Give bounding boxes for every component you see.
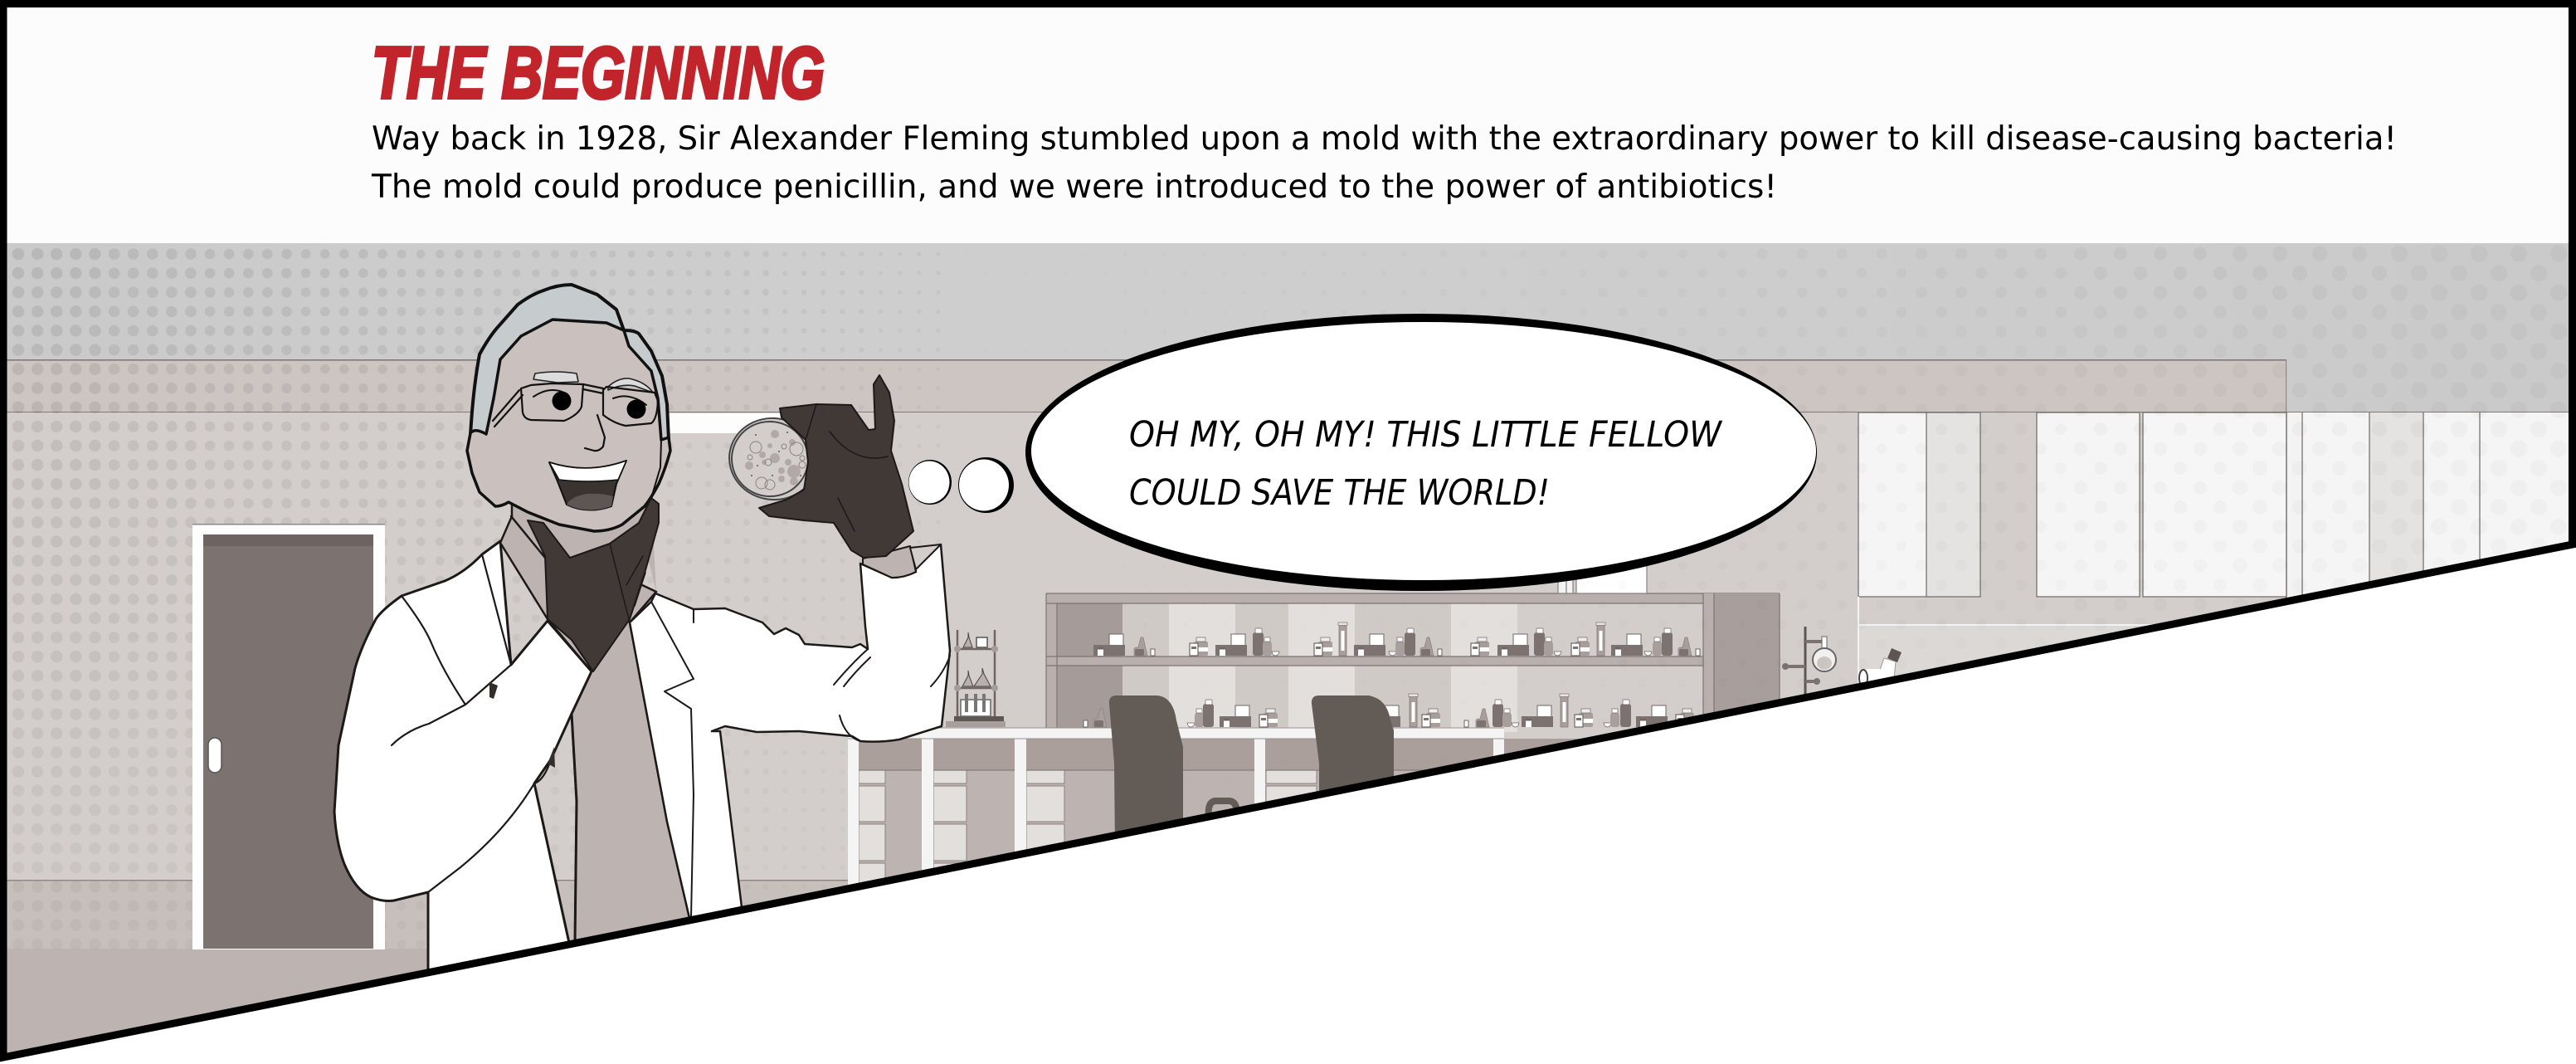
retort stand — [1782, 627, 1836, 697]
wrist and cuff — [863, 546, 916, 578]
speech balloon text: OH MY, OH MY! THIS LITTLE FELLOW — [1129, 414, 1722, 456]
white area below the diagonal — [0, 544, 2576, 1064]
coat buttons — [489, 682, 555, 768]
small white ledge behind glove — [664, 413, 788, 433]
bench drawers — [859, 770, 1317, 913]
eyes — [553, 392, 571, 410]
lower shelf bottles — [1083, 694, 1694, 727]
speech balloon text — [1129, 414, 1722, 514]
lab coat: viewer right side and raised arm — [630, 544, 950, 918]
thought bubble: medium — [958, 457, 1014, 513]
head: face — [467, 320, 670, 531]
lab coat: seams on left side — [392, 554, 569, 943]
shirt — [548, 556, 689, 943]
scientist — [334, 285, 950, 970]
speech balloon text: COULD SAVE THE WORLD! — [1129, 472, 1550, 514]
header panel — [7, 7, 2570, 243]
heading: the beginning: THE BEGINNING — [372, 32, 825, 114]
speech balloon — [1025, 314, 1817, 591]
flask rack — [946, 630, 1006, 727]
item on top of shelf — [1558, 564, 1647, 593]
microscope — [1858, 648, 1902, 689]
bench top and legs — [848, 728, 1504, 979]
lab background — [7, 243, 2570, 1064]
eyebrows — [533, 372, 578, 383]
nose — [585, 415, 605, 451]
intro text — [371, 120, 2397, 206]
coat lapel lines on right side — [651, 602, 950, 918]
glove on chin — [528, 498, 659, 671]
wall cabinets — [1858, 412, 2569, 645]
petri dish — [724, 412, 822, 505]
intro text: The mold could produce penicillin, and we were introduced to the power of antibiotics! — [371, 168, 1777, 206]
right halftone dots — [956, 243, 2569, 824]
shelving unit — [1046, 564, 1780, 859]
door handle — [208, 738, 222, 773]
left halftone dots — [12, 248, 940, 873]
back counter — [1858, 597, 2274, 741]
door — [192, 524, 385, 949]
chair handle — [1209, 801, 1237, 818]
mouth — [549, 461, 626, 510]
lab bench — [848, 728, 1703, 1052]
upper shelf bottles — [1093, 622, 1700, 656]
thought bubble: small — [908, 460, 952, 505]
lab coat: viewer left side — [334, 541, 592, 970]
head: hair — [470, 285, 669, 440]
chairs — [1109, 696, 1394, 938]
glasses — [493, 383, 658, 427]
neck and shirt collar — [500, 498, 656, 619]
glove holding dish — [759, 375, 913, 558]
intro text: Way back in 1928, Sir Alexander Fleming stumbled upon a mold with the extraordinary power to kill disease-causing bacteria! — [372, 120, 2397, 158]
